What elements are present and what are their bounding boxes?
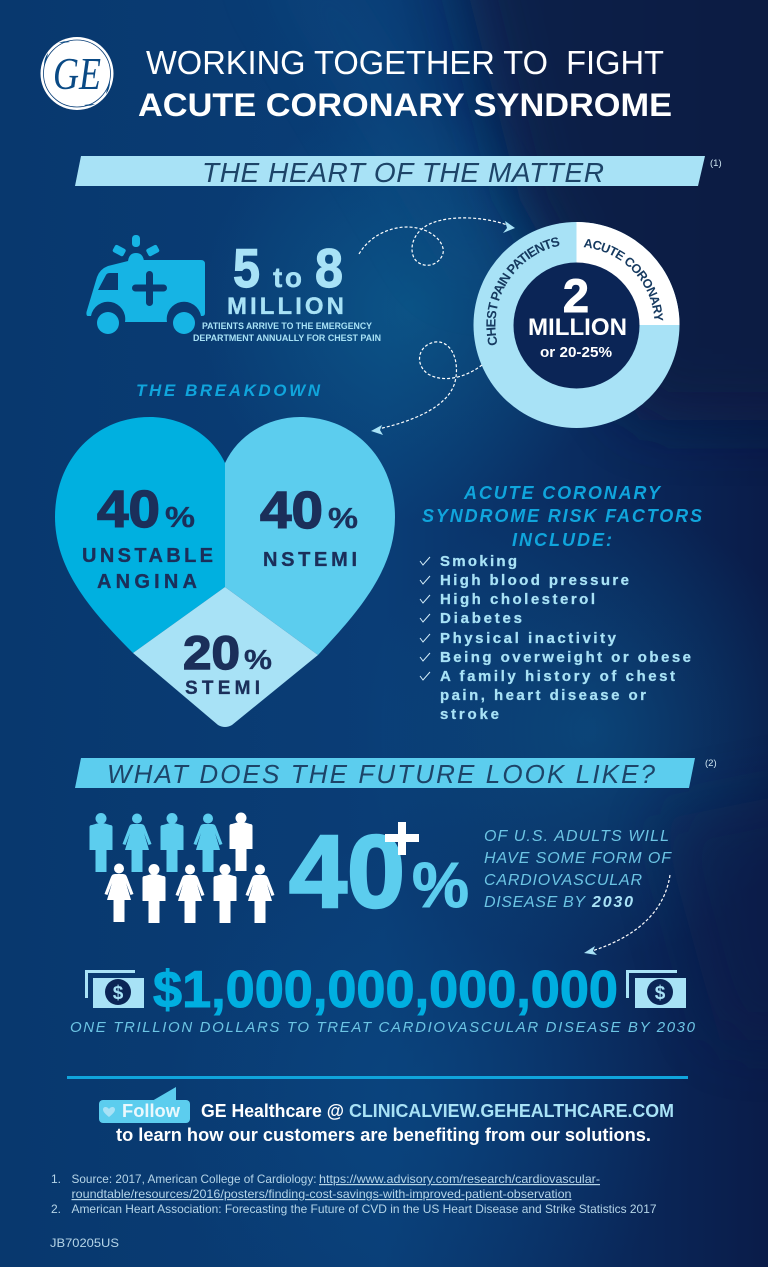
checklist: risk factors: Physical inactivity (440, 630, 617, 647)
call to action text (116, 1101, 674, 1145)
section banner: the heart of the matter (75, 156, 705, 188)
heading: the breakdown: THE BREAKDOWN (136, 381, 321, 400)
caption: one trillion dollars: ONE TRILLION DOLLARS TO TREAT CARDIOVASCULAR DISEASE BY 2030 (70, 1019, 696, 1036)
call to action text: GE Healthcare @ (201, 1101, 344, 1121)
segment: unstable angina: ANGINA (97, 571, 197, 593)
donut chart: chest pain patients (474, 222, 680, 428)
text: adults with cardiovascular disease: HAVE SOME FORM OF (484, 850, 672, 867)
text: adults with cardiovascular disease: OF U.S. ADULTS WILL (484, 828, 669, 845)
heading: risk factors: ACUTE CORONARY (463, 483, 662, 503)
segment: stemi: 20 (183, 626, 240, 679)
job code: JB70205US (50, 1236, 119, 1250)
heart chart: breakdown (55, 417, 395, 727)
checklist: risk factors: High blood pressure (440, 572, 629, 589)
stat: 5 to 8 million: to (273, 262, 302, 293)
call to action text: CLINICALVIEW.GEHEALTHCARE.COM (349, 1101, 674, 1121)
footnotes: American Heart Association: Forecasting the Future of CVD in the US Heart Disease and Strike Statistics 2017 (72, 1202, 657, 1216)
text: adults with cardiovascular disease: 2030 (591, 894, 633, 911)
footnotes (51, 1172, 657, 1216)
title: WORKING TOGETHER TO FIGHT (146, 44, 664, 81)
footnotes: Source: 2017, American College of Cardiology: (72, 1172, 316, 1186)
stat: 5 to 8 million: 5 (233, 237, 260, 299)
pictogram: ten people (90, 812, 274, 923)
section banner: the heart of the matter: THE HEART OF THE MATTER (202, 157, 604, 188)
title (138, 44, 672, 123)
title: ACUTE CORONARY SYNDROME (138, 87, 672, 123)
call to action text: to learn how our customers are benefiting from our solutions. (116, 1125, 651, 1145)
stat: 40 percent plus: 40 (289, 814, 405, 929)
segment: unstable angina: UNSTABLE (82, 545, 213, 567)
footnote marker 2: (2) (705, 758, 717, 769)
footnotes: 1. (51, 1172, 61, 1186)
segment: stemi: STEMI (185, 678, 260, 699)
heading: risk factors: SYNDROME RISK FACTORS (422, 506, 702, 526)
heading: risk factors (422, 483, 702, 550)
checklist: risk factors: stroke (440, 706, 499, 723)
arrow: ambulance to donut (359, 218, 515, 265)
checklist: risk factors: High cholesterol (440, 591, 595, 608)
divider line (67, 1076, 688, 1079)
segment: stemi (183, 626, 272, 699)
icon: money left (85, 970, 144, 1008)
donut chart: chest pain patients: CHEST PAIN PATIENTS (486, 237, 560, 346)
icon: money right (626, 970, 686, 1008)
stat: 5 to 8 million: 8 (315, 237, 343, 299)
checklist: risk factors: Being overweight or obese (440, 649, 691, 666)
segment: unstable angina (82, 481, 213, 593)
footnotes: 2. (51, 1202, 61, 1216)
checklist: risk factors: Diabetes (440, 610, 522, 627)
stat: 5 to 8 million (193, 237, 381, 344)
GE logo (40, 37, 114, 110)
text: adults with cardiovascular disease: CARDIOVASCULAR (484, 872, 642, 889)
stat: 40 percent plus (289, 814, 469, 929)
checklist: risk factors: pain, heart disease or (440, 687, 646, 704)
icon: money right: $ (655, 983, 666, 1004)
icon: money left: $ (113, 983, 124, 1004)
stat: 5 to 8 million: MILLION (227, 293, 344, 320)
arrow: to trillion dollars (584, 875, 670, 955)
stat: 5 to 8 million: DEPARTMENT ANNUALLY FOR CHEST PAIN (193, 333, 381, 344)
segment: nstemi (260, 482, 358, 571)
donut chart: chest pain patients: 2 (563, 269, 589, 322)
icon: ambulance (86, 235, 205, 334)
follow button (99, 1087, 190, 1123)
footnote marker 1: (1) (710, 158, 722, 169)
segment: unstable angina: % (165, 502, 195, 534)
text: adults with cardiovascular disease: DISEASE BY (484, 894, 586, 911)
segment: nstemi: % (328, 503, 358, 535)
segment: unstable angina: 40 (97, 481, 160, 539)
footnotes: https://www.advisory.com/research/cardiovascular- (319, 1172, 600, 1186)
segment: stemi: % (244, 644, 272, 675)
GE logo: GE (53, 48, 101, 99)
arrow: donut to heart (371, 342, 482, 435)
stat: 40 percent plus: % (412, 849, 469, 921)
heading: risk factors: INCLUDE: (512, 530, 612, 550)
segment: nstemi: 40 (260, 482, 323, 540)
donut chart: chest pain patients: MILLION (528, 314, 627, 341)
footnotes: roundtable/resources/2016/posters/finding-cost-savings-with-improved-patient-observation (72, 1187, 572, 1201)
checklist: risk factors: Smoking (440, 553, 517, 570)
donut chart: chest pain patients: or 20-25% (540, 344, 612, 361)
donut chart: chest pain patients: ACUTE CORONARY (584, 239, 664, 321)
checklist: risk factors: A family history of chest (440, 668, 675, 685)
stat: one trillion dollars: $1,000,000,000,000 (153, 961, 618, 1019)
follow button: Follow (122, 1101, 181, 1121)
section banner: future: WHAT DOES THE FUTURE LOOK LIKE? (107, 759, 656, 789)
stat: 5 to 8 million: PATIENTS ARRIVE TO THE EMERGENCY (202, 321, 373, 332)
checklist: risk factors (420, 553, 691, 723)
text: adults with cardiovascular disease (484, 828, 672, 911)
segment: nstemi: NSTEMI (263, 549, 357, 571)
